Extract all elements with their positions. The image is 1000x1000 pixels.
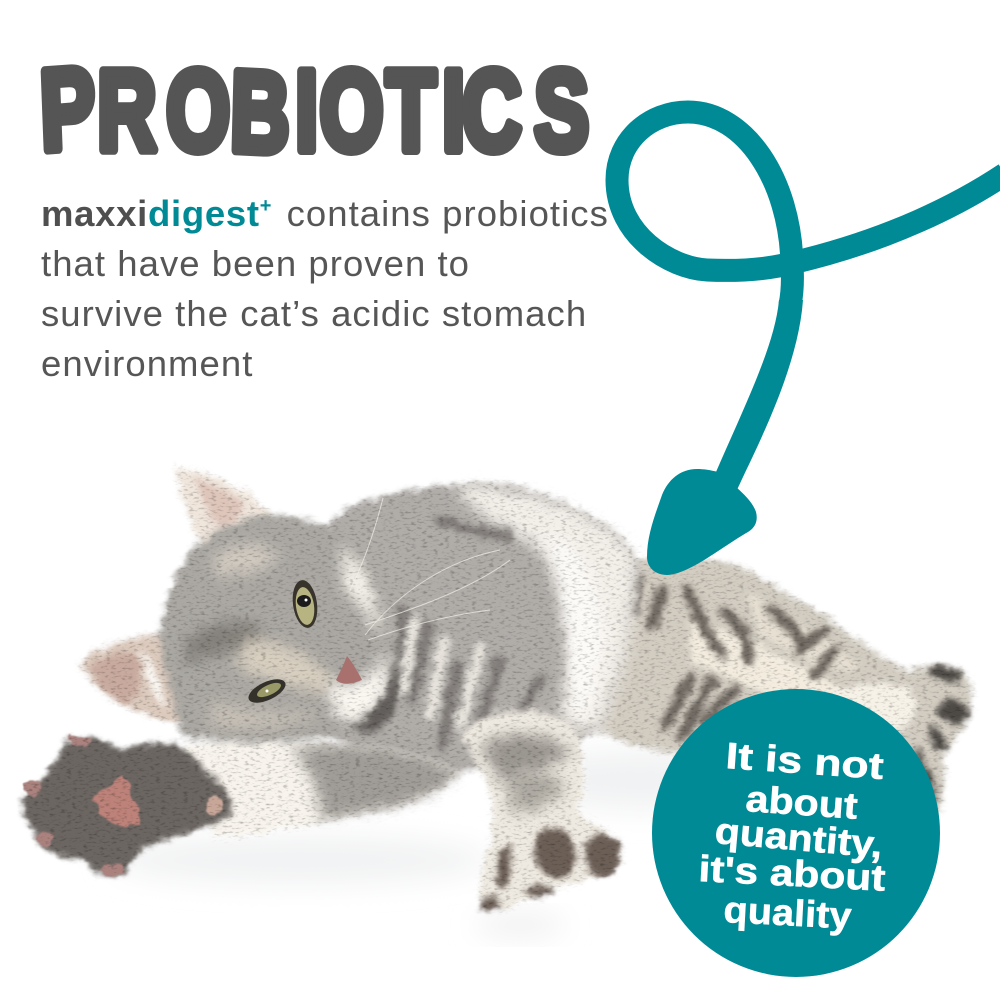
intro text: maxxidigest+ contains probiotics — [41, 193, 609, 234]
nose — [336, 656, 362, 684]
ground shadow — [110, 836, 490, 884]
loop arrow — [617, 112, 1000, 575]
body — [300, 483, 640, 775]
badge: it's about — [698, 848, 886, 899]
pale upper belly — [455, 484, 636, 732]
rear legs — [598, 557, 973, 815]
cat fur body — [20, 467, 973, 913]
left arm — [180, 739, 460, 840]
rear paw toes — [915, 666, 972, 805]
intro text: environment — [41, 343, 253, 384]
rear leg stripes — [634, 578, 835, 735]
intro text: survive the cat’s acidic stomach — [41, 293, 587, 334]
head markings — [185, 545, 388, 730]
eye upper — [290, 579, 320, 629]
whiskers — [350, 498, 510, 640]
left paw — [20, 736, 233, 878]
chin shadow — [348, 665, 398, 732]
intro text: that have been proven to — [41, 243, 470, 284]
head — [158, 514, 396, 743]
paw toes — [23, 735, 222, 876]
pale flank stripes — [403, 620, 480, 725]
lower ear — [78, 635, 196, 725]
badge — [652, 689, 940, 977]
paw pad — [93, 778, 140, 827]
upper ear — [173, 467, 273, 570]
intro text — [41, 193, 609, 384]
badge: about — [744, 778, 859, 827]
lower paw toes — [480, 822, 621, 913]
badge: quantity, — [713, 810, 884, 866]
front leg down — [462, 710, 624, 910]
badge: quality — [723, 889, 853, 937]
eye lower — [245, 674, 289, 708]
body stripes — [395, 520, 540, 745]
badge: It is not — [724, 735, 885, 787]
title: PROBIOTICS — [38, 44, 589, 178]
